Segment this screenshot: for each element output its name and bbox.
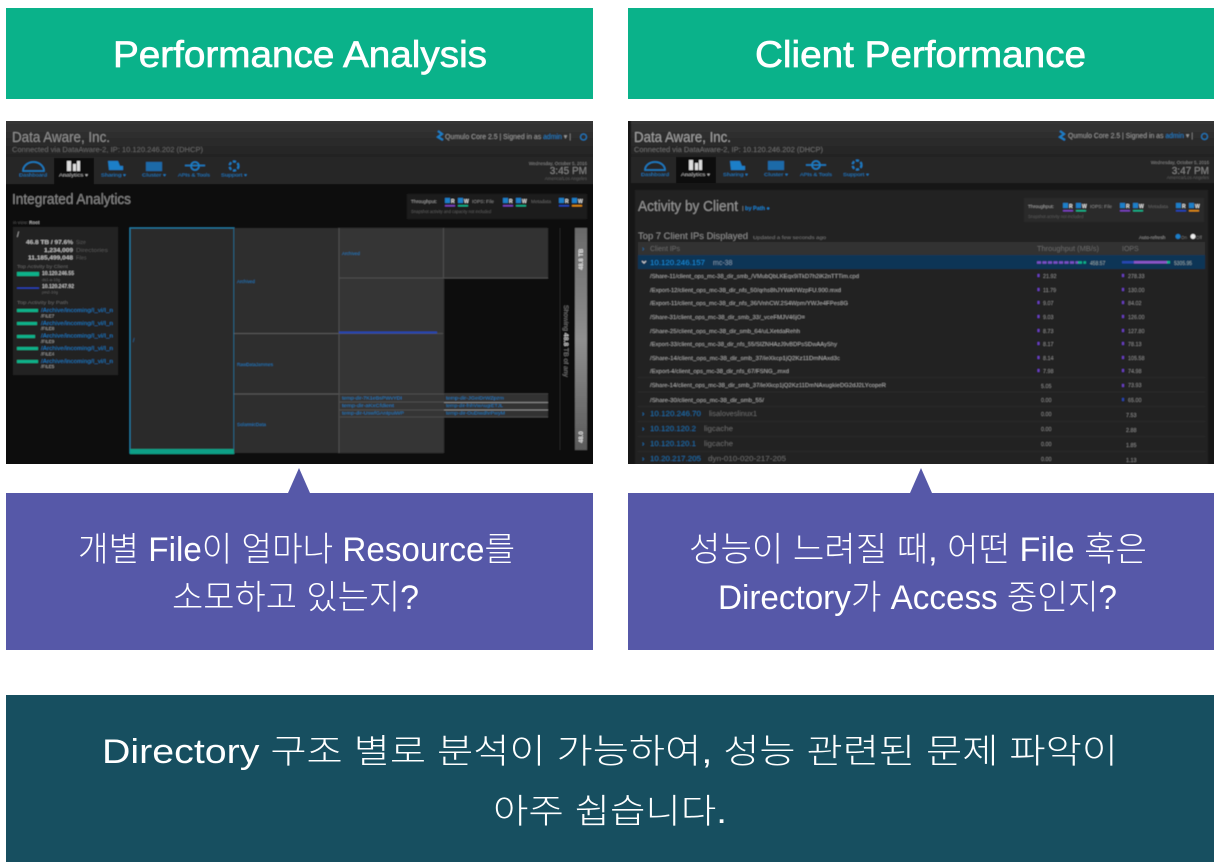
collapsed client rows: › [642, 411, 645, 418]
treemap [130, 228, 548, 454]
panel: root statistics [13, 227, 118, 375]
panel: Activity by Client screenshot [620, 115, 1218, 470]
panel: root statistics: /Archive/incoming/I_vi/I_n [41, 334, 113, 340]
treemap: temp-dir-OuDiwdhrPwyM [446, 410, 505, 416]
panel: root statistics: pm2-10g [42, 290, 58, 294]
status bar: signed in: Qumulo Core 2.5 | Signed in as admin ▾ | [1068, 131, 1193, 140]
date and time: America/Los Angeles [1167, 175, 1210, 180]
panel: root statistics: 10.120.246.55 [42, 271, 74, 277]
panel: root statistics: /FILE5 [41, 364, 55, 369]
collapsed client rows [642, 410, 786, 463]
throughput values: 0.00 [1041, 442, 1052, 448]
panel: Activity by Client screenshot: Data Aware, Inc. [634, 129, 731, 146]
navigation tabs: Sharing ▾ [723, 172, 749, 177]
auto-refresh toggle: Auto-refresh [1139, 235, 1166, 241]
navigation tabs: Cluster ▾ [142, 172, 167, 178]
date and time [529, 161, 588, 181]
treemap: temp-dir-7K1eBsPWvYDI [342, 396, 402, 400]
collapsed client rows: › [642, 426, 645, 433]
legend: throughput and IOPS: W [1139, 204, 1144, 210]
panel: Integrated Analytics screenshot: Data Aware, Inc. [12, 129, 110, 146]
page title: Integrated Analytics [12, 192, 131, 208]
legend: throughput and IOPS: W [1082, 204, 1087, 210]
date and time: 3:45 PM [550, 166, 587, 177]
collapsed client rows: 10.120.120.1 [650, 439, 696, 448]
auto-refresh toggle: Off [1196, 235, 1203, 240]
navigation tabs: Support ▾ [221, 172, 248, 178]
legend: throughput and IOPS [407, 194, 587, 219]
throughput values: 21.92 [1043, 274, 1056, 280]
client detail rows: /Share-30/client_ops_mc-38_dir_smb_55/ [650, 398, 765, 404]
capacity bar: Showing 48.8 TB of any [562, 305, 569, 378]
treemap: temp-dir-aKxCfdient [342, 403, 395, 408]
legend: throughput and IOPS: Snapshot activity not included [1028, 214, 1084, 219]
treemap: Archived [237, 279, 255, 284]
client detail rows: /Export-11/client_ops_mc-38_dir_nfs_36/VnhCW.2S4Wpm/YWJe4FPes8G [650, 301, 848, 307]
panel: root statistics: / [17, 232, 19, 239]
panel: root statistics: Top Activity by Path [17, 300, 69, 305]
treemap: temp-dir-JGeiDrWZpzm [446, 396, 504, 400]
throughput values: 9.03 [1043, 315, 1054, 321]
panel: root statistics: 1,234,009 [44, 248, 73, 254]
table header row: › [642, 246, 645, 253]
navigation tabs: Cluster ▾ [764, 172, 789, 177]
panel: root statistics: /Archive/incoming/I_vi/I_n [41, 308, 113, 314]
table header row: Client IPs [650, 246, 680, 253]
legend: throughput and IOPS: W [1195, 204, 1200, 210]
IOPS values: 126.00 [1128, 315, 1144, 321]
selected client row: 458.57 [1090, 261, 1106, 267]
client detail rows: /Export-33/client_ops_mc-38_dir_nfs_55/SIZNHAzJ9vBDPsSDwAAyShy [650, 342, 837, 348]
legend: throughput and IOPS: Metadata [1148, 204, 1168, 210]
treemap: temp-dir-UswfGAnIpuiWP [342, 410, 404, 416]
heading: Client Performance: Client Performance [755, 34, 1086, 75]
summary banner [6, 695, 1214, 862]
breadcrumb: in view: Root [13, 220, 40, 225]
panel: root statistics: /Archive/incoming/I_vi/I_n [41, 321, 113, 327]
treemap: Archived [342, 251, 360, 256]
IOPS values: 130.00 [1128, 288, 1144, 294]
panel: Integrated Analytics screenshot [0, 115, 600, 470]
panel: root statistics: /FILE9 [41, 339, 55, 344]
page title: Activity by Client [638, 199, 738, 215]
selected client row [638, 255, 1205, 269]
navigation tabs [19, 158, 248, 184]
navigation tabs: Analytics ▾ [681, 172, 711, 177]
legend: throughput and IOPS: W [464, 199, 469, 205]
navigation tabs: Support ▾ [843, 172, 870, 177]
panel: root statistics: Directories [76, 248, 109, 254]
navigation tabs: Analytics ▾ [59, 172, 89, 178]
throughput values: 0.00 [1041, 427, 1052, 433]
panel: root statistics: 10.120.247.92 [42, 284, 74, 290]
heading: Performance Analysis [6, 8, 593, 99]
capacity bar [560, 228, 587, 450]
legend: throughput and IOPS: R [1069, 204, 1073, 210]
table header row [638, 242, 1205, 255]
callout: file resource usage: 개별 File이 얼마나 Resource를 [78, 531, 515, 569]
legend: throughput and IOPS: IOPS: File [472, 199, 494, 205]
summary banner: Directory 구조 별로 분석이 가능하여, 성능 관련된 문제 파악이 [102, 733, 1118, 771]
legend: throughput and IOPS: R [451, 199, 455, 205]
callout: file resource usage: 소모하고 있는지? [172, 579, 419, 617]
legend: throughput and IOPS: R [1182, 204, 1186, 210]
callout: active file or directory: 성능이 느려질 때, 어떤 File 혹은 [689, 531, 1147, 569]
collapsed client rows: dyn-010-020-217-205 [708, 456, 786, 463]
heading: Performance Analysis: Performance Analysis [113, 34, 487, 75]
navigation tabs [641, 157, 870, 183]
IOPS values: 127.80 [1128, 329, 1144, 335]
table title: Top 7 Client IPs Displayed [638, 231, 748, 241]
throughput values: 9.07 [1043, 301, 1054, 307]
navigation tabs: APIs & Tools [178, 172, 211, 178]
summary banner: 아주 쉽습니다. [493, 793, 727, 831]
selected client row: 10.120.246.157 [650, 258, 705, 267]
IOPS values: 1.85 [1126, 443, 1136, 449]
heading: Client Performance [628, 8, 1214, 99]
IOPS values: 65.00 [1128, 398, 1142, 404]
IOPS values: 1.13 [1126, 458, 1136, 464]
legend: throughput and IOPS: IOPS: File [1090, 204, 1112, 210]
collapsed client rows: › [642, 456, 645, 463]
legend: throughput and IOPS: W [578, 199, 583, 205]
selected client row: mc-38 [713, 260, 733, 267]
panel: root statistics: /FILE7 [41, 314, 55, 318]
selected client row: 5305.95 [1174, 261, 1192, 267]
throughput values: 8.14 [1043, 356, 1054, 362]
throughput values: 0.00 [1041, 412, 1052, 418]
date and time: America/Los Angeles [545, 176, 588, 181]
client detail rows [649, 273, 886, 404]
throughput values: 5.05 [1041, 384, 1052, 390]
IOPS values: 78.13 [1128, 342, 1142, 348]
legend: throughput and IOPS [1027, 202, 1201, 220]
callout: active file or directory: Directory가 Access 중인지? [718, 579, 1117, 617]
panel: root statistics: Size [76, 240, 86, 246]
collapsed client rows: › [642, 441, 645, 448]
throughput values: 0.00 [1041, 457, 1052, 463]
legend: throughput and IOPS: Snapshot activity and capacity not included [411, 209, 492, 214]
legend: throughput and IOPS: Metadata [531, 199, 551, 205]
capacity bar: 48.8 TB [579, 248, 585, 270]
auto-refresh toggle: On [1181, 235, 1188, 240]
collapsed client rows: 10.20.217.205 [650, 454, 701, 463]
panel: root statistics: Top Activity by Client [17, 264, 69, 269]
panel: root statistics: /FILE8 [41, 326, 55, 331]
panel: root statistics: ds1-a-10g [42, 277, 60, 282]
navigation tabs: Dashboard [19, 172, 48, 178]
throughput values: 11.79 [1043, 288, 1056, 294]
panel: Activity by Client screenshot: Connected via DataAware-2, IP: 10.120.246.202 (DHCP) [634, 145, 823, 154]
treemap: SolarmicData [237, 422, 266, 427]
date and time: 3:47 PM [1172, 166, 1209, 177]
treemap: / [133, 338, 135, 344]
IOPS values: 73.93 [1128, 383, 1142, 389]
client detail rows: /Share-14/client_ops_mc-38_dir_smb_37/ieXkcp1jQ2Kz11DmNAxd3c [650, 356, 840, 362]
table note: Updated a few seconds ago [753, 235, 827, 240]
table header row: IOPS [1122, 246, 1139, 253]
panel: Integrated Analytics screenshot: Connected via DataAware-2, IP: 10.120.246.202 (DHCP) [12, 145, 203, 154]
date and time: Wednesday, October 5, 2016 [529, 161, 587, 166]
throughput values: 0.00 [1041, 398, 1052, 404]
collapsed client rows: ligcache [704, 426, 733, 433]
navigation tabs: APIs & Tools [800, 172, 833, 177]
date and time [1151, 160, 1210, 180]
callout: active file or directory [628, 468, 1214, 650]
client detail rows: /Share-11/client_ops_mc-38_dir_smb_/VMubQbLKEqx9iTkD7h2iK2nTTTim.cpd [650, 274, 859, 280]
legend: throughput and IOPS: R [509, 199, 513, 205]
legend: throughput and IOPS: R [1126, 204, 1130, 210]
client detail rows: /Share-25/client_ops_mc-38_dir_smb_64/uLXetdaRehh [650, 329, 800, 335]
navigation tabs: Sharing ▾ [101, 172, 127, 178]
client detail rows: /Share-14/client_ops_mc-38_dir_smb_37/ieXkcp1jQ2Kz11DmNAxugkieDG2dJ2LYcopeR [650, 383, 886, 389]
legend: throughput and IOPS: Throughput: [1028, 204, 1054, 210]
IOPS values: 105.58 [1128, 356, 1144, 362]
collapsed client rows: lisaloveslinux1 [709, 411, 757, 418]
throughput values [1038, 274, 1056, 463]
table header row: Throughput (MB/s) [1037, 246, 1099, 253]
treemap: temp-dir-fnhVwAugiETJL [446, 403, 504, 408]
capacity bar: 48.0 [579, 431, 585, 443]
panel: root statistics: 46.8 TB / 97.6% [26, 240, 74, 246]
collapsed client rows: 10.120.120.2 [650, 424, 696, 433]
panel: root statistics: 11,185,499,048 [28, 256, 73, 262]
panel: root statistics: /FILE4 [41, 352, 55, 356]
panel: root statistics: /Archive/incoming/I_vi/I_n [41, 359, 113, 365]
status bar: signed in: Qumulo Core 2.5 | Signed in as admin ▾ | [445, 132, 571, 141]
legend: throughput and IOPS: R [565, 199, 569, 205]
callout: file resource usage [6, 468, 593, 650]
throughput values: 8.17 [1043, 342, 1054, 348]
IOPS values: 74.98 [1128, 369, 1142, 375]
collapsed client rows: ligcache [704, 441, 733, 448]
client detail rows: /Share-31/client_ops_mc-38_dir_smb_33/_vceFMJV46jO= [650, 315, 805, 321]
date and time: Wednesday, October 5, 2016 [1151, 160, 1209, 165]
legend: throughput and IOPS: Throughput: [411, 199, 437, 205]
legend: throughput and IOPS: W [522, 199, 527, 205]
client detail rows: /Export-4/client_ops_mc-38_dir_nfs_67/FSNG_.mxd [650, 369, 789, 375]
throughput values: 8.73 [1043, 329, 1054, 335]
throughput values: 7.98 [1043, 369, 1054, 375]
IOPS values: 2.88 [1126, 428, 1136, 434]
panel: root statistics: /Archive/incoming/I_vi/I_n [41, 346, 113, 352]
IOPS values: 7.53 [1126, 413, 1136, 419]
IOPS values: 84.02 [1128, 301, 1142, 307]
IOPS values [1122, 274, 1144, 464]
collapsed client rows: 10.120.246.70 [650, 409, 701, 418]
IOPS values: 278.33 [1128, 274, 1144, 280]
treemap: RawDataJammes [237, 362, 274, 367]
navigation tabs: Dashboard [641, 172, 670, 177]
panel: root statistics: Files [76, 256, 87, 262]
client detail rows: /Export-12/client_ops_mc-38_dir_nfs_50/qrhs8hJYWAYWzpFU.900.mxd [650, 288, 841, 294]
auto-refresh toggle [1139, 234, 1203, 241]
link: by Path: | by Path ● [742, 206, 770, 212]
